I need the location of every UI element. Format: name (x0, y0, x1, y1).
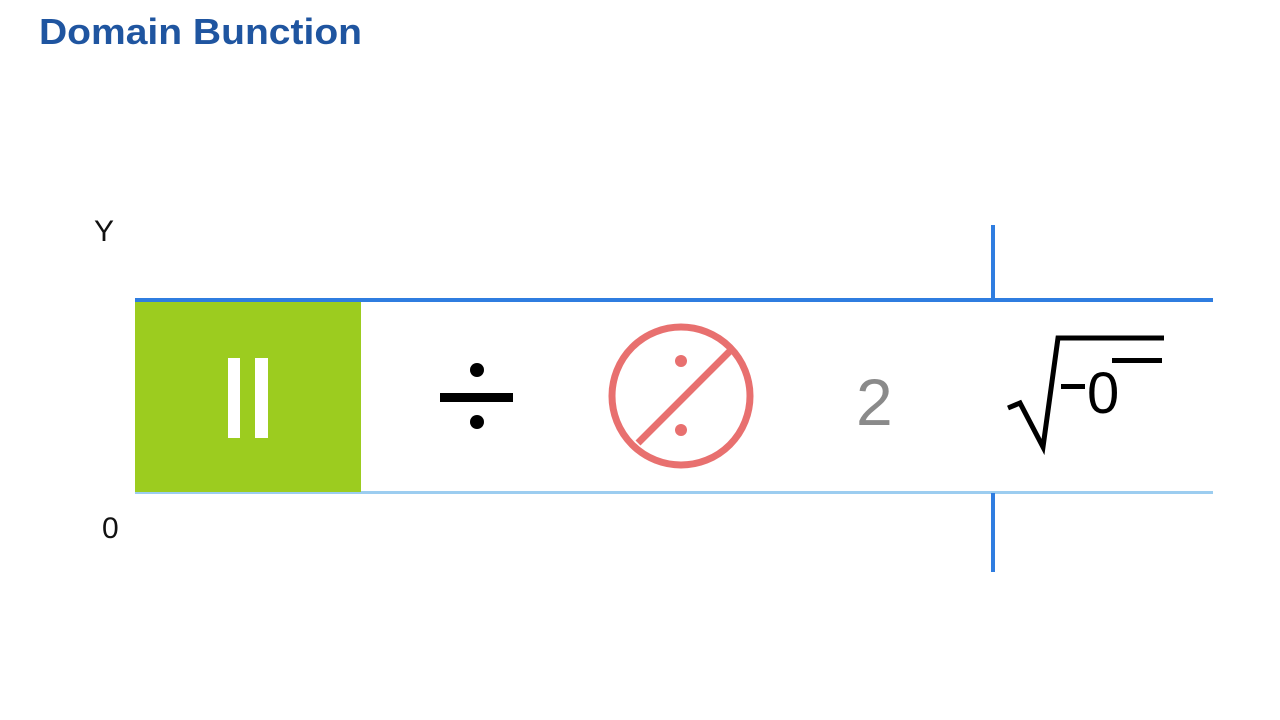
axis label: 0: 0 (102, 512, 119, 545)
title: Domain Bunction (39, 11, 362, 52)
top boundary line (135, 298, 1213, 302)
axis label: Y: Y (94, 215, 114, 248)
bottom boundary line (135, 491, 1213, 494)
square root symbol (1008, 338, 1164, 447)
number 2: 2 (856, 365, 893, 439)
vertical marker top (991, 225, 995, 300)
icon: divide sign (440, 363, 513, 429)
icon: prohibited ratio (612, 327, 750, 465)
green block with pause icon (135, 302, 361, 492)
square root symbol: 0 (1087, 361, 1119, 426)
vertical marker bottom (991, 493, 995, 572)
